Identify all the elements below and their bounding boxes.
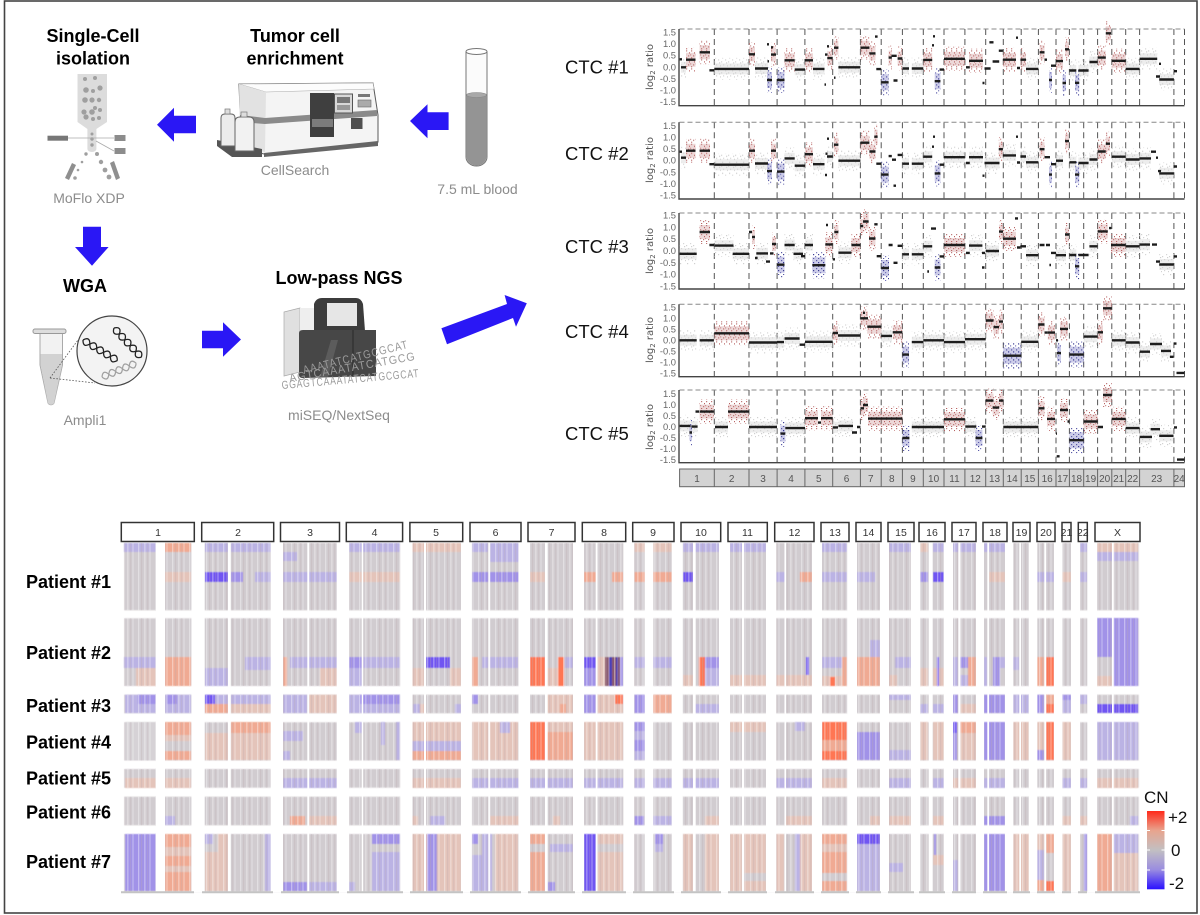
segments and points: -1.0: [660, 178, 676, 189]
icon: blood tube: [466, 48, 487, 166]
segments and points: -1.5: [660, 96, 676, 107]
segments and points: [660, 301, 1184, 378]
label: CTC #3: CTC #3: [565, 236, 629, 257]
y-axis title: 2: [649, 343, 657, 348]
chromosome strip under CTC charts: 23: [1151, 474, 1163, 485]
arrow: WGA to NGS: [202, 322, 241, 357]
chromosome header boxes: 8: [601, 527, 607, 539]
y-axis title: 2: [649, 163, 657, 168]
heatmap panel: [26, 522, 1140, 892]
segments and points: [660, 120, 1177, 200]
chromosome strip under CTC charts: 10: [928, 474, 940, 485]
arrow: blood to CellSearch: [410, 104, 449, 138]
arrow: CellSearch to MoFlo: [157, 108, 196, 142]
chromosome header boxes: 12: [789, 527, 800, 539]
caption: CellSearch: CellSearch: [261, 162, 329, 178]
chromosome strip under CTC charts: 8: [889, 474, 895, 485]
caption: 7.5 mL blood: 7.5 mL blood: [437, 181, 518, 197]
chromosome strip under CTC charts: 17: [1057, 474, 1069, 485]
chromosome strip under CTC charts: 18: [1071, 474, 1082, 485]
label: Patient #4: Patient #4: [26, 732, 111, 752]
heatmap row: Patient #1: [124, 543, 1139, 610]
y-axis title: log: [645, 168, 656, 183]
segments and points: 0.5: [663, 233, 676, 244]
chromosome header boxes: 11: [742, 527, 753, 539]
label: Patient #3: Patient #3: [26, 696, 111, 716]
chromosome header boxes: 5: [433, 527, 439, 539]
segments and points: [660, 210, 1177, 291]
chromosome strip under CTC charts: 15: [1024, 474, 1036, 485]
y-axis title: 2: [649, 254, 657, 259]
chromosome header boxes: 3: [307, 527, 313, 539]
chromosome strip under CTC charts: [680, 469, 1185, 487]
chromosome strip under CTC charts: 14: [1007, 474, 1018, 485]
segments and points: -0.5: [660, 257, 676, 268]
chromosome header boxes: 1: [155, 527, 161, 539]
segments and points: 0.5: [663, 50, 676, 61]
segments and points: -1.0: [660, 269, 676, 280]
y-axis title: ratio: [645, 228, 656, 254]
segments and points: -1.5: [660, 367, 676, 378]
segments and points: -0.5: [660, 166, 676, 177]
heading: Tumor cell enrichment: Tumor cell: [250, 26, 340, 46]
heading: Single-Cell isolation: Single-Cell: [46, 26, 140, 46]
chromosome strip under CTC charts: 7: [868, 474, 874, 485]
chromosome header boxes: 21: [1061, 527, 1072, 539]
y-axis title: ratio: [645, 404, 656, 430]
chromosome strip under CTC charts: 21: [1113, 474, 1125, 485]
chromosome strip under CTC charts: 22: [1127, 474, 1139, 485]
chromosome header boxes: 10: [695, 527, 707, 539]
colour legend: CN: -2: [1169, 874, 1184, 893]
chromosome header boxes: 13: [829, 527, 841, 539]
colour legend: CN: CN: [1144, 788, 1169, 807]
label: Patient #6: Patient #6: [26, 802, 111, 822]
chromosome strip under CTC charts: 13: [989, 474, 1000, 485]
y-axis title: log: [645, 75, 656, 90]
segments and points: 0.5: [663, 323, 676, 334]
arrow: MoFlo to WGA: [75, 227, 109, 266]
colour legend: CN: 0: [1171, 841, 1180, 860]
chromosome strip under CTC charts: 2: [729, 474, 735, 485]
chromosome header boxes: 19: [1016, 527, 1027, 539]
label: CTC #4: CTC #4: [565, 321, 629, 342]
heading: Single-Cell isolation: isolation: [56, 48, 130, 68]
chart: CTC #1 copy number profile: [565, 27, 1184, 107]
y-axis title: ratio: [645, 317, 656, 343]
chromosome strip under CTC charts: 20: [1099, 474, 1111, 485]
caption: MoFlo XDP: MoFlo XDP: [53, 190, 125, 206]
heatmap row: Patient #3: [124, 695, 1139, 713]
icon: Ampli1 tube with DNA zoom: [33, 316, 147, 405]
segments and points: 1.5: [663, 27, 676, 38]
segments and points: 1.0: [663, 132, 676, 143]
y-axis title: ratio: [645, 137, 656, 163]
segments and points: 0.0: [663, 245, 676, 256]
segments and points: 1.0: [663, 312, 676, 323]
arrow: NGS to CTC profiles: [441, 295, 527, 344]
chart: CTC #5 copy number profile: [565, 388, 1184, 465]
chromosome header boxes: 20: [1040, 527, 1052, 539]
colour legend: CN: +2: [1168, 808, 1187, 827]
chromosome strip under CTC charts: 9: [910, 474, 916, 485]
heatmap row: Patient #7: [124, 834, 1139, 892]
segments and points: 0.0: [663, 61, 676, 72]
y-axis title: 2: [649, 430, 657, 435]
chromosome header boxes: 22: [1077, 527, 1089, 539]
segments and points: 1.0: [663, 399, 676, 410]
label: CTC #5: CTC #5: [565, 423, 629, 444]
segments and points: -1.0: [660, 84, 676, 95]
chart: CTC #4 copy number profile: [565, 301, 1184, 378]
label: Patient #5: Patient #5: [26, 768, 111, 788]
label: CTC #2: CTC #2: [565, 143, 629, 164]
chromosome strip under CTC charts: 6: [844, 474, 850, 485]
label: Patient #2: Patient #2: [26, 643, 111, 663]
segments and points: 1.0: [663, 221, 676, 232]
chromosome header boxes: 7: [549, 527, 555, 539]
chromosome strip under CTC charts: 19: [1085, 474, 1097, 485]
caption: miSEQ/NextSeq: miSEQ/NextSeq: [288, 407, 390, 423]
sequence letters: AAATATCATGCGCAT: [302, 339, 410, 377]
segments and points: 1.0: [663, 38, 676, 49]
segments and points: -1.0: [660, 356, 676, 367]
label: Patient #1: Patient #1: [26, 572, 111, 592]
label: CTC #1: CTC #1: [565, 56, 629, 78]
segments and points: -0.5: [660, 345, 676, 356]
segments and points: -0.5: [660, 73, 676, 84]
segments and points: 1.5: [663, 388, 676, 399]
chromosome header boxes: 4: [372, 527, 378, 539]
caption: Ampli1: Ampli1: [64, 412, 107, 428]
y-axis title: ratio: [645, 44, 656, 70]
heading: WGA: WGA: [63, 276, 107, 296]
segments and points: -1.5: [660, 189, 676, 200]
segments and points: [660, 388, 1184, 465]
chromosome header boxes: [121, 522, 1140, 542]
segments and points: 1.5: [663, 301, 676, 312]
y-axis title: log: [645, 348, 656, 363]
heatmap row: Patient #6: [124, 797, 1139, 825]
chromosome strip under CTC charts: 1: [694, 474, 700, 485]
colour legend: CN: [1144, 788, 1187, 893]
heading: Tumor cell enrichment: enrichment: [246, 48, 344, 68]
chromosome header boxes: 6: [493, 527, 499, 539]
segments and points: 1.5: [663, 210, 676, 221]
heatmap row: Patient #2: [124, 618, 1139, 686]
sequence letters: GGAGTCAAATATCATGCGCAT: [281, 368, 420, 392]
segments and points: [660, 27, 1177, 107]
chromosome strip under CTC charts: 16: [1042, 474, 1053, 485]
y-axis title: log: [645, 259, 656, 274]
segments and points: -1.5: [660, 280, 676, 291]
segments and points: -1.0: [660, 443, 676, 454]
segments and points: 0.0: [663, 155, 676, 166]
heading: Low-pass NGS: Low-pass NGS: [275, 268, 403, 288]
chromosome strip under CTC charts: 4: [788, 474, 794, 485]
icon: sequencer instrument: [284, 298, 376, 378]
sequence letters: AGTCAAATATCATGCG: [288, 351, 417, 385]
chromosome header boxes: 2: [235, 527, 241, 539]
chromosome header boxes: 16: [926, 527, 938, 539]
chromosome header boxes: 14: [863, 527, 874, 539]
segments and points: -0.5: [660, 432, 676, 443]
segments and points: 1.5: [663, 120, 676, 131]
chromosome header boxes: 18: [989, 527, 1001, 539]
chromosome strip under CTC charts: 11: [949, 474, 960, 485]
chart: CTC #3 copy number profile: [565, 210, 1184, 291]
chromosome header boxes: 15: [895, 527, 907, 539]
chromosome header boxes: X: [1114, 527, 1121, 539]
sequence letters: [281, 339, 420, 392]
heatmap row: Patient #4: [124, 722, 1139, 760]
workflow panel: [33, 26, 527, 428]
segments and points: 0.5: [663, 410, 676, 421]
label: Patient #7: Patient #7: [26, 852, 111, 872]
heatmap row: Patient #5: [124, 769, 1139, 788]
segments and points: 0.0: [663, 334, 676, 345]
chromosome strip under CTC charts: 3: [760, 474, 766, 485]
y-axis title: log: [645, 435, 656, 450]
segments and points: 0.5: [663, 143, 676, 154]
icon: CellSearch instrument: [217, 83, 378, 157]
segments and points: -1.5: [660, 454, 676, 465]
segments and points: 0.0: [663, 421, 676, 432]
y-axis title: 2: [649, 70, 657, 75]
chart: CTC #2 copy number profile: [565, 120, 1184, 200]
chromosome header boxes: 17: [958, 527, 970, 539]
chromosome strip under CTC charts: 24: [1174, 474, 1185, 485]
icon: MoFlo flow sorter: [48, 74, 126, 180]
chromosome strip under CTC charts: 12: [970, 474, 981, 485]
chromosome strip under CTC charts: 5: [816, 474, 822, 485]
chromosome header boxes: 9: [650, 527, 656, 539]
